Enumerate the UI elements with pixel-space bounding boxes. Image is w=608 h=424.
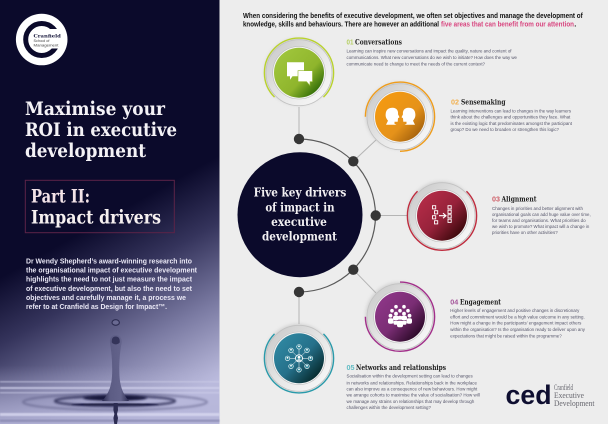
badge 01: conversations icon: [250, 24, 348, 122]
text block: 04 engagement: Higher levels of engagement and positive changes in discretionary: [450, 308, 580, 313]
logo: Cranfield School of Management: [16, 14, 68, 65]
logo: Cranfield School of Management: School of: [34, 39, 50, 43]
text block: 05 networks and relationships: Networks and relationships: [356, 363, 446, 372]
text block: 01 conversations: Conversations: [355, 38, 402, 47]
title: [25, 98, 177, 162]
heading: intro statement: five areas that can benefit from our attention: [441, 19, 574, 28]
logo: Cranfield School of Management: Cranfield: [34, 34, 61, 40]
icon: crowd: [388, 305, 412, 327]
text block: 04 engagement: within the organisation? Is the organisation ready to deliver upon any: [450, 327, 586, 332]
text block: 01 conversations: communications. What new conversations do we wish to initiate? How does the way we: [346, 55, 517, 60]
text block: 02 sensemaking: Learning interventions can lead to changes in the way learners: [450, 109, 572, 114]
logo: ced Cranfield Executive Development: ced: [506, 380, 552, 410]
text block: 05 networks and relationships: Socialisation within the development setting can lead to changes: [346, 374, 473, 379]
text block: 01 conversations: Learning can inspire new conversations and impact the quality, nature and content of: [346, 49, 512, 54]
text block: 02 sensemaking: think about the challenges and opportunities they face. What: [450, 115, 571, 120]
central circle: five key drivers: of impact in: [265, 199, 335, 214]
badge 03: alignment icon: [393, 167, 491, 265]
text block: 05 networks and relationships: [346, 363, 480, 410]
text block: 05 networks and relationships: challenges within the development setting?: [346, 405, 431, 410]
text block: intro paragraph: [26, 256, 198, 311]
icon: two heads facing: [386, 108, 415, 125]
icon: flow squares with arrow: [432, 206, 451, 224]
text block: 04 engagement: expectations that might be raised within the programme?: [450, 333, 562, 338]
logo: ced Cranfield Executive Development: [506, 380, 595, 410]
text block: 03 alignment: Changes in priorities and better alignment with: [492, 206, 583, 211]
text block: 02 sensemaking: 02: [451, 98, 459, 107]
icon: people network: [285, 344, 313, 372]
text block: 05 networks and relationships: we manage any strains on relationships that may develop through: [346, 399, 475, 404]
text block: 03 alignment: priorities have on other activities?: [492, 230, 558, 235]
text block: 05 networks and relationships: we arrange cohorts to maximise the value of socialisation? How will: [346, 393, 480, 398]
subtitle box: Part II Impact drivers: [25, 180, 174, 233]
text block: 04 engagement: How might a change in the participants’ engagement impact others: [450, 321, 582, 326]
text block: intro paragraph: the organisational impact of executive development: [26, 266, 198, 274]
text block: 03 alignment: we wish to promote? What impact will a change in: [492, 224, 590, 229]
text block: intro paragraph: of executive development, but also the need to set: [26, 284, 192, 293]
title: development: [25, 140, 146, 162]
text block: 05 networks and relationships: in networks and relationships. Relationships back in the workplace: [346, 380, 477, 385]
logo: ced Cranfield Executive Development: Development: [554, 399, 595, 408]
text block: intro paragraph: refer to at Cranfield as Design for Impact™.: [26, 302, 167, 311]
connector lines and arc: [294, 107, 408, 324]
text block: 04 engagement: Engagement: [460, 297, 501, 306]
panel: left dark sidebar with water droplet: [0, 0, 220, 424]
text block: 01 conversations: communicate need to change to meet the needs of the current context?: [346, 61, 485, 66]
heading: intro statement: knowledge, skills and behaviours. There are however an additional: [243, 19, 439, 28]
text block: intro paragraph: objectives and carefully manage it, a process we: [26, 293, 186, 302]
badge 05: networks icon: [250, 309, 348, 407]
text block: 05 networks and relationships: 05: [346, 363, 354, 372]
logo: ced Cranfield Executive Development: Executive: [554, 391, 584, 400]
subtitle box: Part II Impact drivers: Part II:: [31, 186, 90, 208]
central circle: five key drivers: development: [262, 229, 337, 244]
text block: 04 engagement: effort and commitment would be a high value outcome in any setting.: [450, 314, 585, 319]
text block: 01 conversations: 01: [346, 38, 354, 47]
badge 04: engagement icon: [365, 282, 435, 351]
text block: 04 engagement: 04: [450, 297, 459, 306]
text block: 03 alignment: Alignment: [501, 195, 537, 204]
water droplet column: [102, 288, 129, 424]
text block: 02 sensemaking: Sensemaking: [461, 98, 506, 107]
text block: 02 sensemaking: group? Do we need to broaden or strengthen this logic?: [450, 127, 559, 132]
text block: 03 alignment: 03: [492, 195, 500, 204]
text block: intro paragraph: Dr Wendy Shepherd’s award-winning research into: [26, 256, 192, 266]
text block: 02 sensemaking: [450, 98, 573, 132]
text block: 04 engagement: [450, 297, 586, 338]
heading: intro statement: [243, 11, 583, 28]
title: ROI in executive: [25, 119, 177, 141]
text block: 01 conversations: [346, 38, 517, 66]
water ripples: [0, 381, 220, 422]
subtitle box: Part II Impact drivers: Impact drivers: [31, 206, 161, 228]
text block: 02 sensemaking: is the existing logic that predominates amongst the participant: [450, 121, 573, 126]
text block: intro paragraph: highlights the need to not just measure the impact: [26, 275, 193, 284]
heading: intro statement: .: [574, 19, 576, 28]
text block: 03 alignment: [492, 195, 591, 235]
icon: speech bubbles: [287, 62, 312, 86]
text block: 03 alignment: organisational goals can add huge value over time,: [492, 212, 591, 217]
logo: Cranfield School of Management: Management: [34, 44, 59, 48]
central circle: five key drivers: executive: [271, 214, 327, 229]
central circle: five key drivers: Five key drivers: [254, 185, 346, 200]
text block: 05 networks and relationships: can also improve as a consequence of new behaviours. How might: [346, 386, 478, 391]
central circle: five key drivers: [238, 152, 362, 277]
title: Maximise your: [25, 98, 166, 120]
logo: ced Cranfield Executive Development: Cranfield: [554, 383, 573, 392]
badge 02: sensemaking icon: [365, 82, 435, 151]
text block: 03 alignment: for teams and organisations. What priorities do: [492, 218, 586, 223]
